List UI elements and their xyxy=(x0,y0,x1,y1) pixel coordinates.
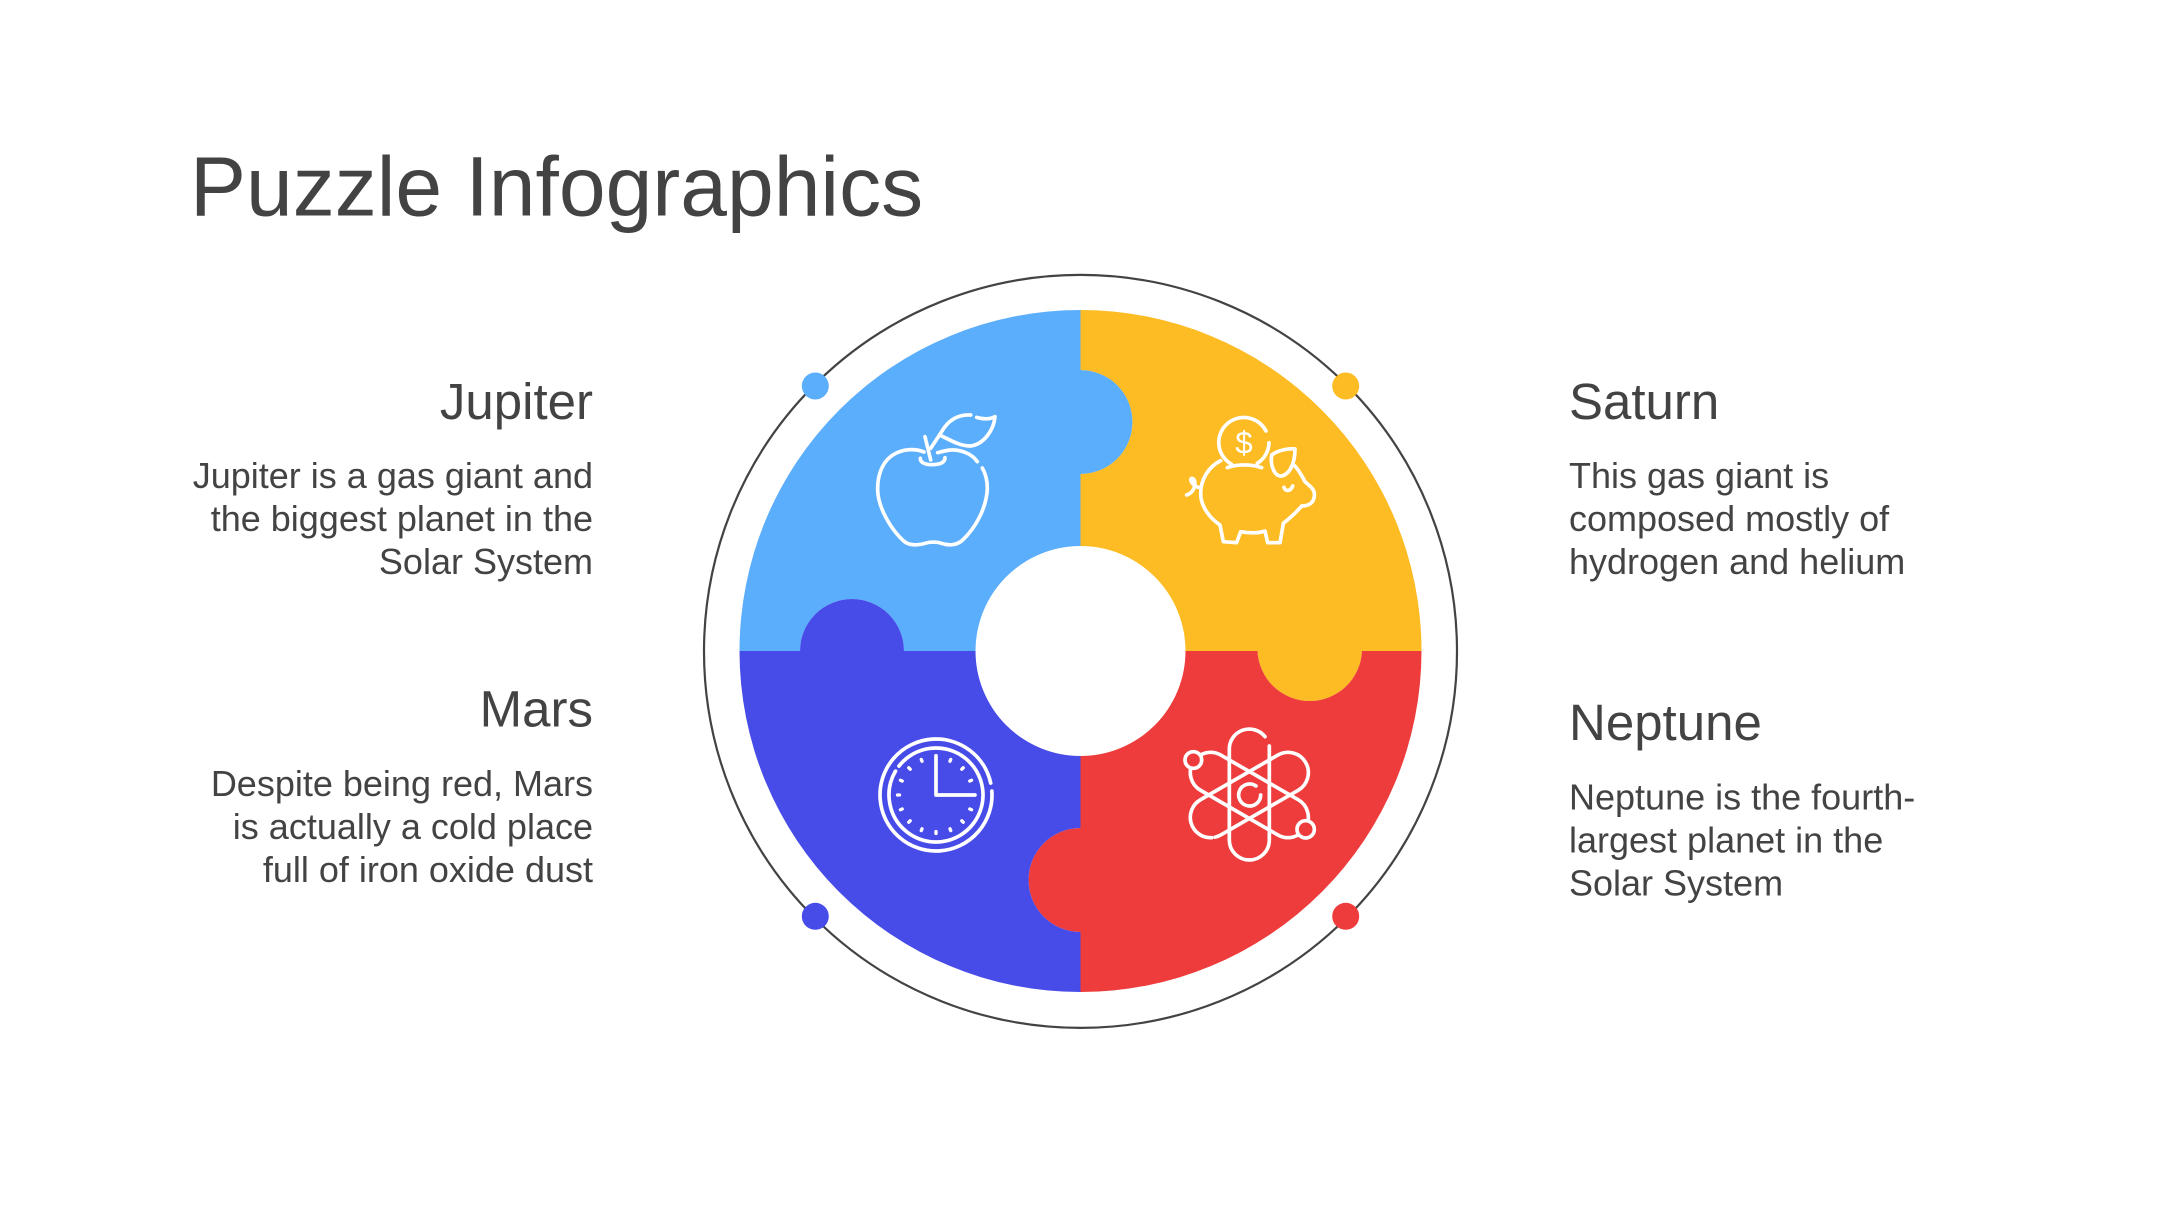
dot: Saturn xyxy=(1332,372,1359,400)
dot: Jupiter xyxy=(802,372,829,400)
text block: Neptune: Neptune is the fourth- xyxy=(1569,776,1915,817)
icon: apple xyxy=(878,415,995,545)
text block: Saturn: composed mostly of xyxy=(1569,498,1890,539)
title: Puzzle Infographics xyxy=(190,140,923,234)
text block: Saturn: hydrogen and helium xyxy=(1569,541,1905,582)
text block: Neptune: Solar System xyxy=(1569,862,1783,904)
text block: Neptune: Neptune xyxy=(1569,694,1762,751)
text block: Mars: is actually a cold place xyxy=(233,806,593,847)
text block: Mars: Despite being red, Mars xyxy=(211,763,593,804)
text block: Mars: Mars xyxy=(480,680,593,738)
text block: Jupiter: Jupiter xyxy=(440,373,593,430)
puzzle piece: Saturn xyxy=(1080,310,1422,701)
puzzle piece: Mars xyxy=(740,599,1080,992)
icon: piggy bank: $ xyxy=(1235,425,1253,460)
text block: Neptune: largest planet in the xyxy=(1569,820,1883,860)
icon: atom xyxy=(1183,729,1316,860)
icon: clock xyxy=(870,729,1002,861)
icon: piggy bank xyxy=(1187,417,1314,543)
text block: Saturn xyxy=(1569,373,1905,582)
puzzle piece: Neptune xyxy=(1028,651,1422,992)
text block: Neptune xyxy=(1569,694,1915,904)
text block: Saturn: Saturn xyxy=(1569,373,1719,430)
text block: Jupiter: Jupiter is a gas giant and xyxy=(193,455,593,496)
dot: Mars xyxy=(802,903,829,930)
text block: Saturn: This gas giant is xyxy=(1569,455,1829,496)
text block: Jupiter: the biggest planet in the xyxy=(211,498,593,539)
text block: Mars: full of iron oxide dust xyxy=(263,849,593,890)
dot: Neptune xyxy=(1332,903,1359,930)
text block: Jupiter: Solar System xyxy=(379,541,593,582)
text block: Mars xyxy=(211,680,593,890)
text block: Jupiter xyxy=(193,373,593,582)
puzzle piece: Jupiter xyxy=(740,310,1132,651)
outer ring xyxy=(704,275,1457,1028)
